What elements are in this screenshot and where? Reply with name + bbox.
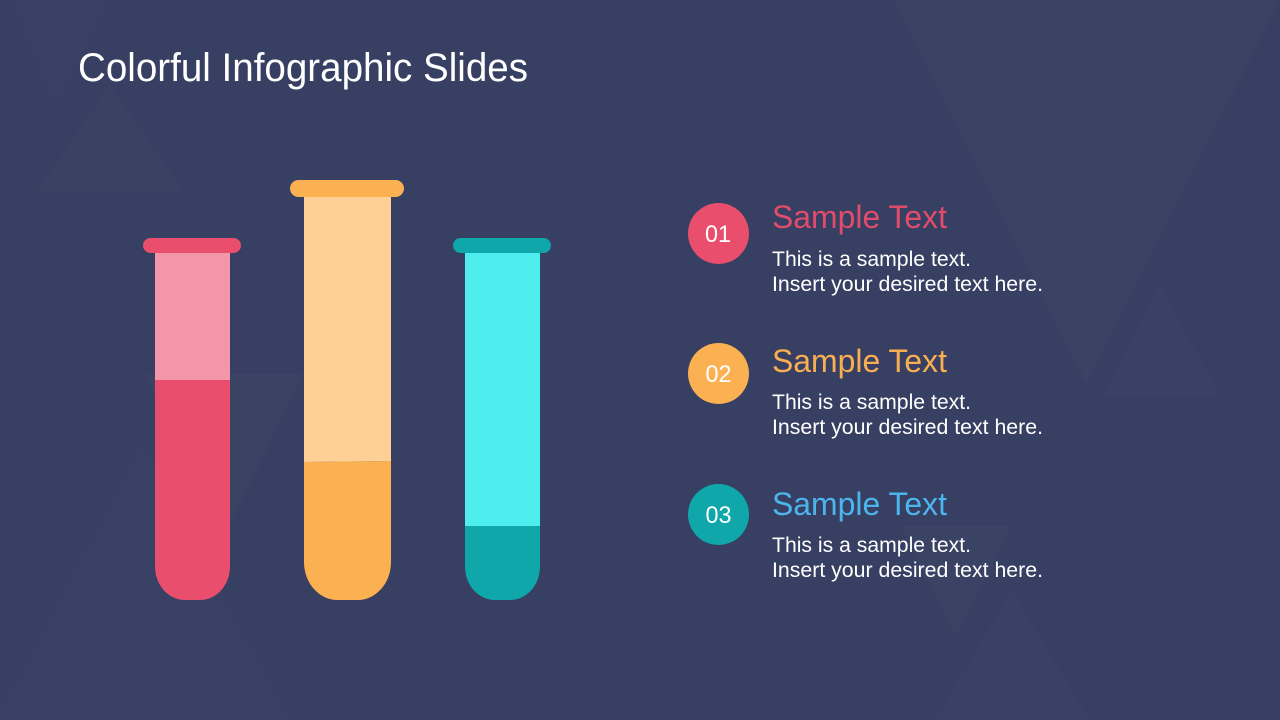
tube 1 glass — [155, 252, 230, 380]
test tube 3: teal — [453, 238, 551, 600]
heading 03: Sample Text — [772, 486, 947, 522]
tube 2 cap — [290, 180, 404, 197]
tube 1 cap — [143, 238, 241, 253]
description 03: This is a sample text. — [772, 534, 971, 557]
test tube 1: red — [143, 238, 241, 600]
tube 2 glass — [304, 196, 391, 462]
tube 3 cap — [453, 238, 551, 253]
heading 01: Sample Text — [772, 199, 947, 235]
title: Colorful Infographic Slides — [78, 46, 528, 90]
badge 01 — [688, 203, 749, 264]
description 01: Insert your desired text here. — [772, 273, 1043, 296]
tube 2 liquid — [304, 461, 391, 600]
description 02: Insert your desired text here. — [772, 416, 1043, 439]
item 02 — [688, 343, 1043, 439]
badge 01: 01 — [705, 221, 731, 248]
heading 02: Sample Text — [772, 343, 947, 379]
description 01: This is a sample text. — [772, 248, 971, 271]
tube 3 glass — [465, 252, 540, 526]
description 03: Insert your desired text here. — [772, 559, 1043, 582]
badge 03: 03 — [706, 502, 732, 529]
tube 3 liquid — [465, 526, 540, 600]
description 02: This is a sample text. — [772, 391, 971, 414]
badge 02: 02 — [706, 361, 732, 388]
item 03 — [688, 484, 1043, 582]
test tube 2: orange — [290, 180, 404, 600]
badge 03 — [688, 484, 749, 545]
item 01 — [688, 199, 1043, 296]
tube 1 liquid — [155, 380, 230, 600]
badge 02 — [688, 343, 749, 404]
